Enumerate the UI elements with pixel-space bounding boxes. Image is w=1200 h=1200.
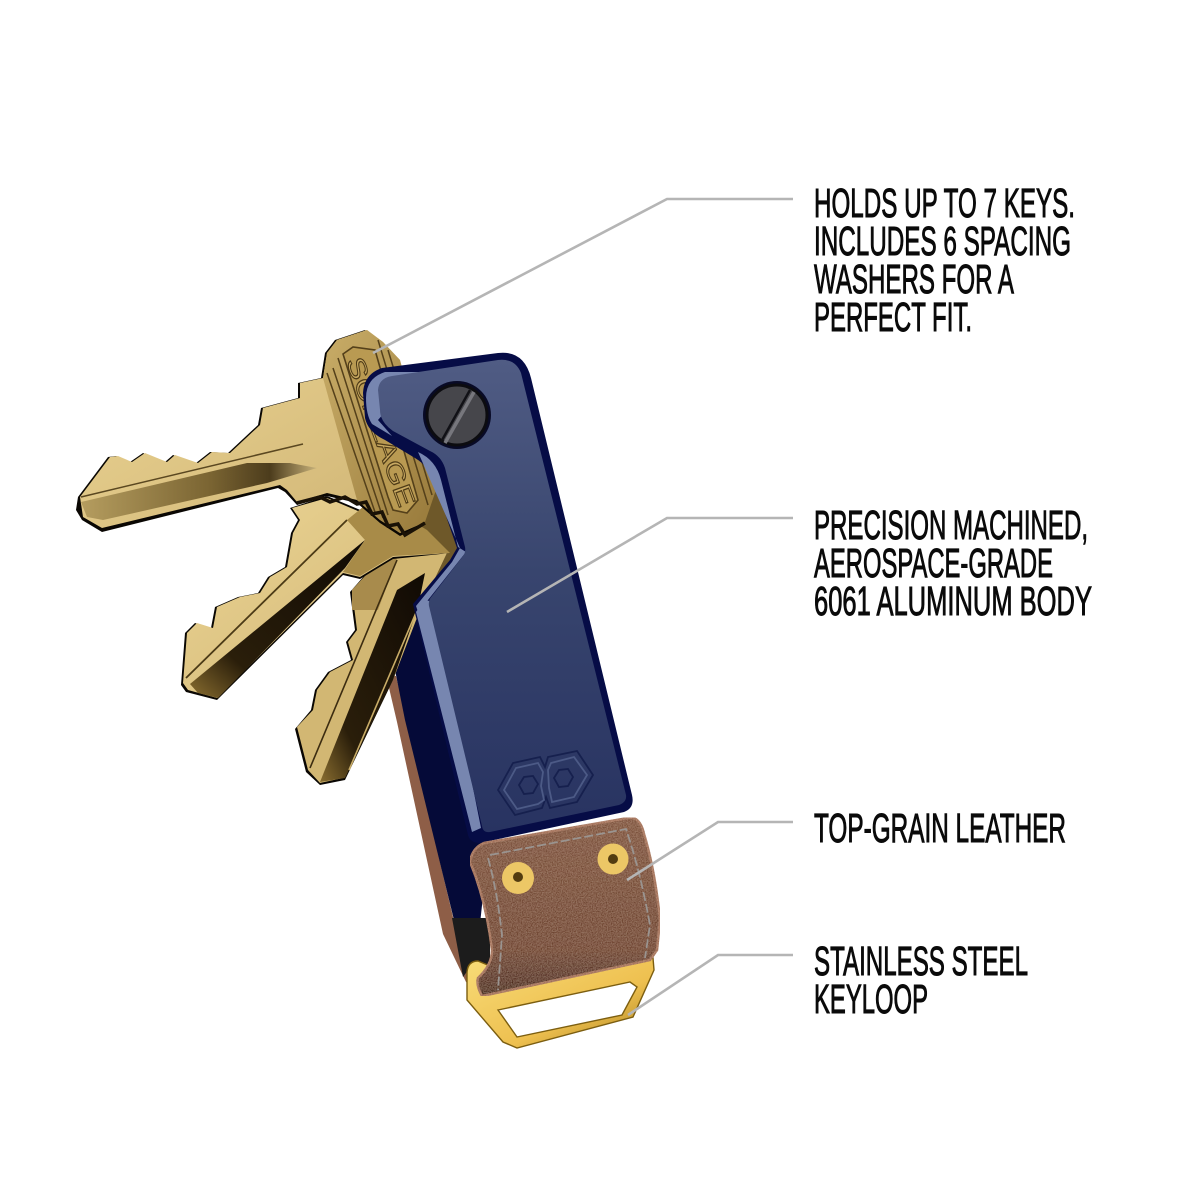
rivet right bbox=[598, 844, 628, 874]
key brand text: SCHLAGE bbox=[340, 353, 420, 511]
text: keys capacity: PERFECT FIT. bbox=[814, 294, 972, 340]
text: keys capacity: WASHERS FOR A bbox=[814, 256, 1014, 302]
screw bbox=[423, 381, 491, 449]
product: key organizer bbox=[76, 330, 660, 1048]
text: keyloop: KEYLOOP bbox=[814, 976, 928, 1022]
text: keyloop: STAINLESS STEEL bbox=[814, 938, 1028, 984]
leather strap front bbox=[470, 818, 660, 996]
body rear shell bbox=[393, 600, 490, 924]
key 1 label plate bbox=[343, 347, 418, 513]
leader line: aluminum body callout bbox=[507, 518, 793, 612]
aluminum body bbox=[363, 353, 633, 843]
stainless steel keyloop bbox=[467, 958, 654, 1048]
embossed hex logo bbox=[498, 751, 593, 815]
key 2 bbox=[181, 496, 450, 700]
black strap lining bbox=[452, 918, 490, 977]
anodized top face bbox=[378, 360, 626, 832]
key 1 bbox=[76, 330, 436, 536]
key stack behind body bbox=[395, 430, 462, 600]
key 1 blade groove bbox=[81, 463, 317, 520]
leader line: leather callout bbox=[627, 822, 793, 880]
stitching bbox=[488, 829, 650, 990]
leather back strap bbox=[386, 675, 478, 990]
text: keys capacity bbox=[814, 180, 1075, 340]
serrated key edge shadow bbox=[297, 497, 425, 535]
key 3 bbox=[295, 553, 447, 785]
text: aluminum body bbox=[814, 502, 1092, 624]
dark outer edge bbox=[363, 353, 633, 843]
light bevel bbox=[366, 372, 481, 832]
key 1 head bbox=[323, 330, 436, 533]
text: keyloop bbox=[814, 938, 1028, 1022]
leader line: keyloop callout bbox=[628, 955, 793, 1015]
leader line: keys callout bbox=[373, 199, 793, 353]
rivet left bbox=[502, 862, 534, 894]
